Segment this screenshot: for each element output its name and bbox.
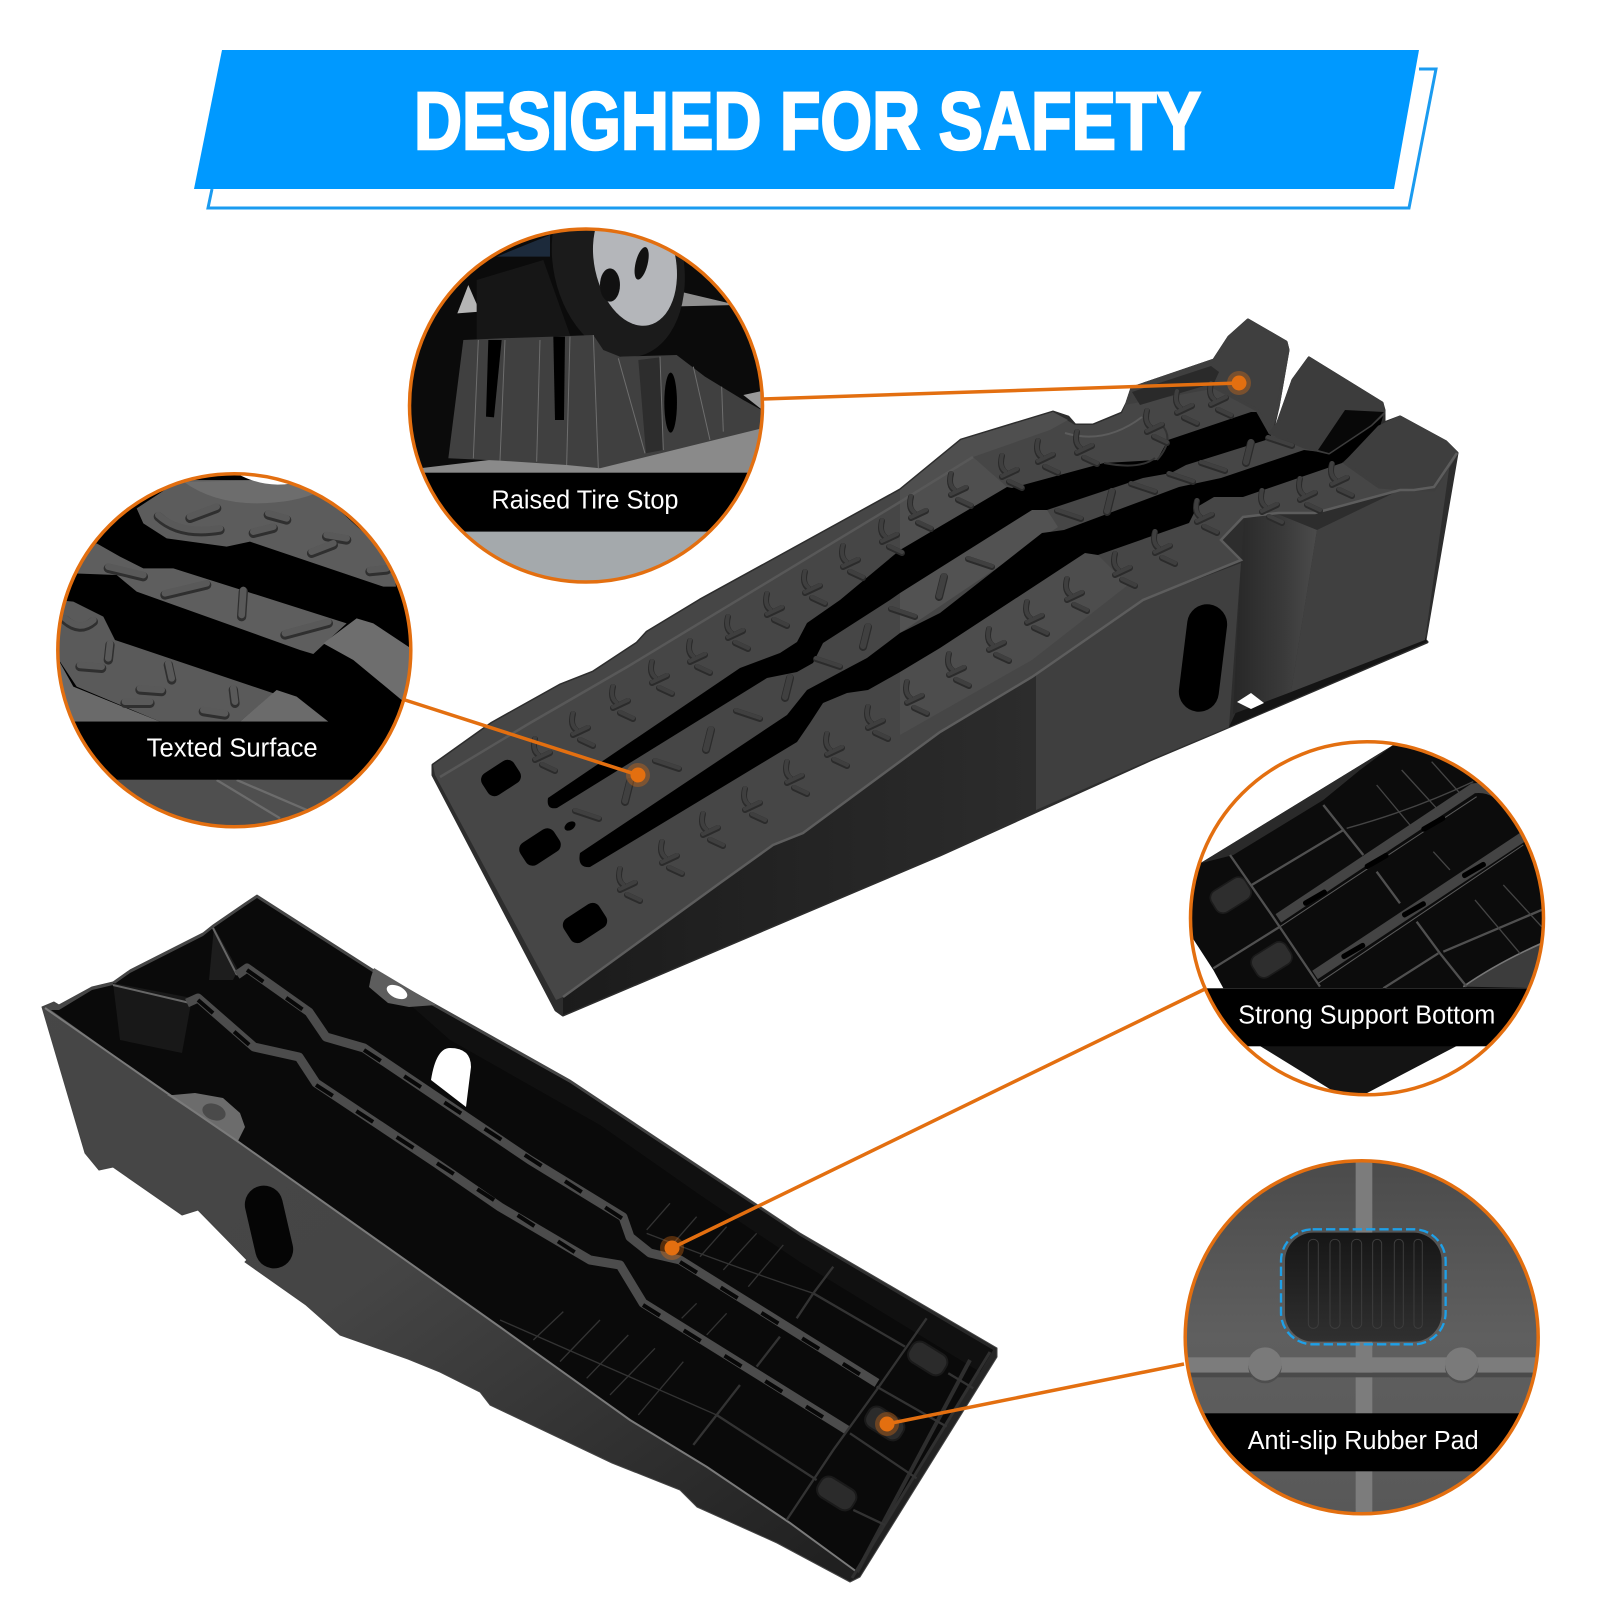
front holes — [478, 757, 610, 946]
callout: anti-slip rubber pad — [1180, 1155, 1547, 1520]
pad — [1285, 1233, 1442, 1342]
cross ribs — [500, 1203, 973, 1525]
label band — [1204, 1413, 1519, 1472]
dashed highlight — [1281, 1229, 1446, 1344]
label text: Strong Support Bottom — [1238, 1001, 1495, 1029]
slot 2 — [579, 413, 1384, 867]
label text: Anti-slip Rubber Pad — [1248, 1427, 1479, 1455]
callout: raised tire stop — [408, 227, 764, 584]
top tab — [369, 968, 436, 1007]
ring — [410, 229, 762, 582]
label text: Texted Surface — [147, 735, 318, 763]
tread marks — [534, 383, 1352, 901]
connector dots — [626, 371, 1251, 1436]
label band — [424, 472, 748, 530]
slot 1 — [548, 412, 1272, 808]
title banner — [194, 50, 1436, 208]
highlights on lip — [45, 1008, 857, 1572]
white through-hole — [431, 1048, 471, 1107]
label band — [75, 722, 352, 780]
bottom ramp: underside of product — [42, 895, 997, 1582]
rail A — [237, 968, 877, 1383]
lighter ramp plateaus — [900, 412, 1068, 552]
side hole — [241, 1182, 297, 1272]
corrugated end wall — [113, 983, 192, 1053]
callout: texted surface — [56, 472, 413, 828]
ring — [1190, 742, 1544, 1095]
low tab — [167, 1093, 245, 1141]
label text: Raised Tire Stop — [492, 486, 678, 514]
track surface — [433, 360, 1414, 1000]
side hole — [1177, 602, 1229, 714]
rubber pads — [814, 1338, 951, 1514]
label band — [1206, 988, 1528, 1046]
interior cavity — [51, 898, 993, 1570]
connector lines — [405, 383, 1239, 1424]
rail B — [187, 998, 847, 1430]
callout: strong support bottom — [1186, 742, 1548, 1095]
heading: DESIGHED FOR SAFETY — [414, 76, 1201, 167]
ring — [58, 474, 411, 827]
tire stop teeth — [1127, 320, 1288, 433]
top ramp: upper side of product — [433, 320, 1457, 1015]
edge highlights — [563, 453, 1457, 997]
ring — [1185, 1161, 1538, 1514]
